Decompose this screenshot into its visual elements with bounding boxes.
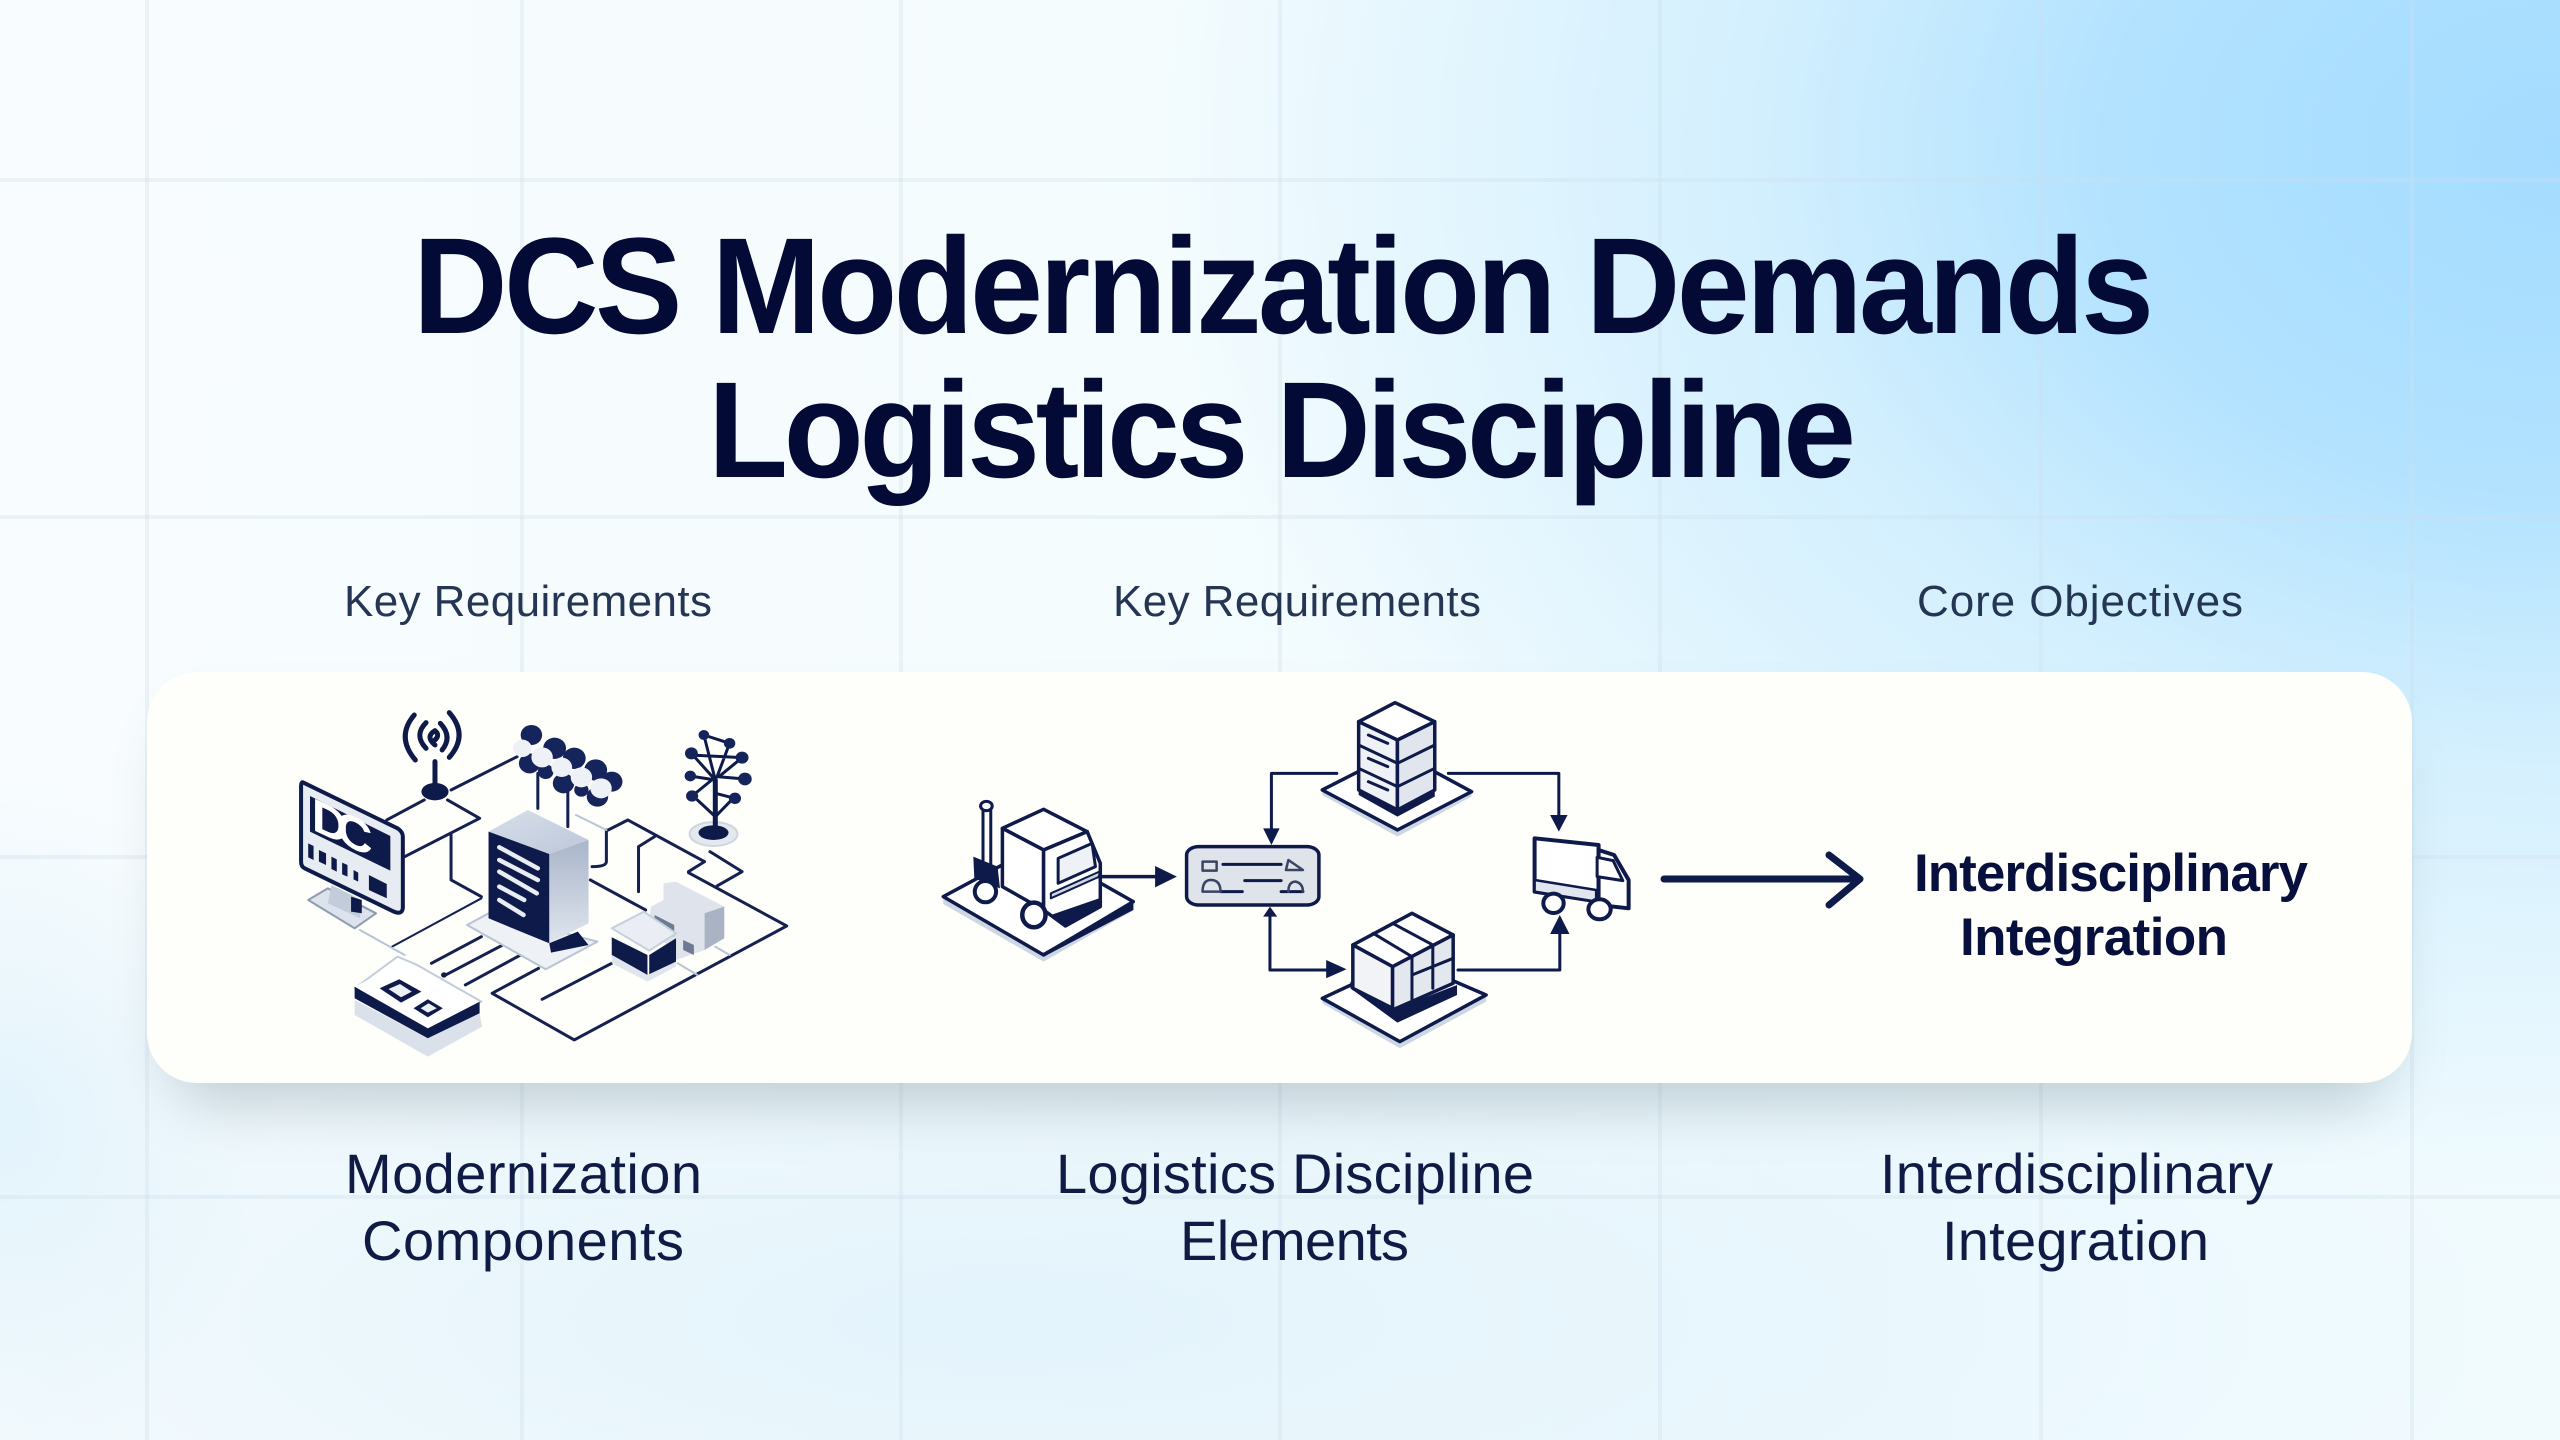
icon: crates on pallet: [1322, 913, 1486, 1048]
icon: monitor: DC: [312, 787, 372, 868]
icon: logistics flow diagram: [943, 703, 1629, 1048]
column header labels: Key Requirements: [1113, 577, 1481, 626]
bottom label: interdisciplinary integration: Integration: [1942, 1209, 2209, 1272]
icon: modernization components isometric network: [301, 713, 787, 1057]
icon: delivery truck: [1535, 838, 1629, 919]
bottom label: logistics discipline elements: [1056, 1142, 1534, 1272]
bottom label: modernization components: [345, 1142, 702, 1272]
arrow: truck to control card: [1099, 866, 1177, 887]
icon: network tower tree: [685, 730, 752, 846]
icon: control card: [1187, 847, 1319, 905]
panel: main white card: [147, 672, 2412, 1083]
arrow: rack to delivery truck: [1448, 773, 1568, 832]
arrow: crate to delivery truck: [1458, 915, 1569, 970]
bottom label: modernization components: Modernization: [345, 1142, 702, 1205]
icon: storage rack on platform: [1322, 703, 1472, 837]
title: Logistics Discipline: [708, 354, 1856, 507]
bottom label: modernization components: Components: [362, 1209, 684, 1272]
icon: controller board: [355, 957, 482, 1057]
bottom label: logistics discipline elements: Logistics Discipline: [1056, 1142, 1534, 1205]
icon: server tower: [467, 810, 597, 969]
bottom label: logistics discipline elements: Elements: [1180, 1209, 1409, 1272]
bottom label: interdisciplinary integration: [1880, 1142, 2273, 1272]
arrow: card to crate: [1263, 907, 1347, 978]
title: DCS Modernization Demands: [413, 210, 2154, 363]
column header labels: Core Objectives: [1917, 577, 2243, 626]
icon: factory and box: [612, 882, 724, 982]
title: [413, 210, 2154, 507]
icon: node cluster: [513, 725, 622, 807]
arrow: rack to card: [1263, 773, 1337, 845]
bottom label: interdisciplinary integration: Interdisciplinary: [1880, 1142, 2273, 1205]
panel result text: Integration: [1960, 908, 2228, 967]
icon: forklift truck on platform: [943, 801, 1134, 962]
column header labels: Key Requirements: [344, 577, 712, 626]
icon: wireless antenna: [405, 713, 459, 800]
panel result text: Interdisciplinary: [1914, 844, 2309, 903]
column header labels: [344, 577, 2243, 626]
panel result text: [1914, 844, 2309, 967]
arrow: flow to integration: [1664, 855, 1860, 905]
icon: monitor: [301, 782, 403, 928]
